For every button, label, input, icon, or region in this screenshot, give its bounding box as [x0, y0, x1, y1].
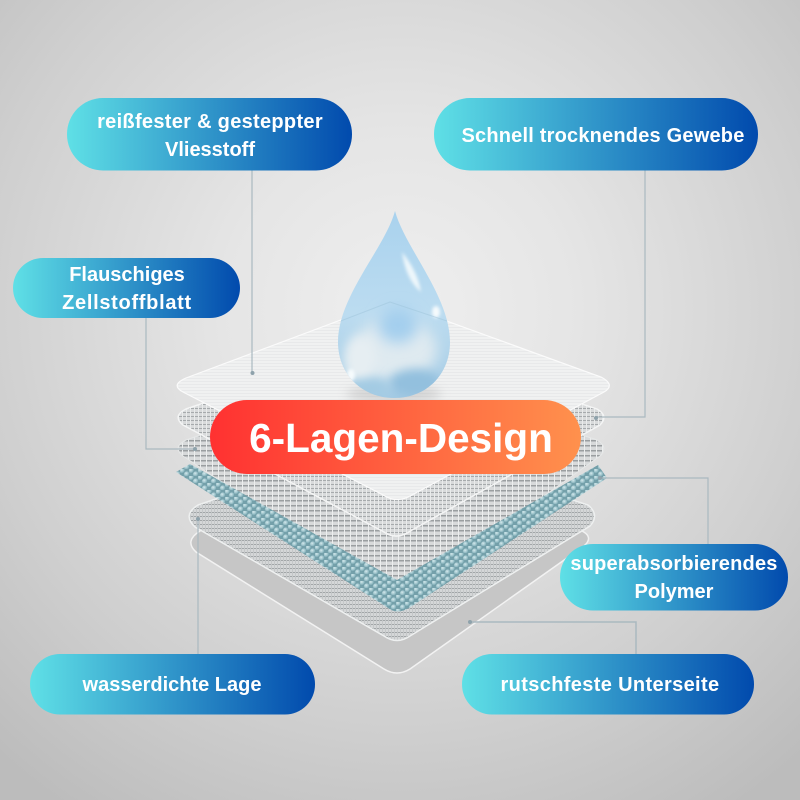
- layer 3: fluffy pulp sheet: [178, 370, 604, 594]
- layer 4: superabsorbent polymer beads: [176, 464, 607, 612]
- pill: wasserdichte Lage: [30, 654, 315, 714]
- icon: water drop: [338, 211, 450, 402]
- pill: Schnell trocknendes Gewebe: [434, 98, 758, 170]
- pill: rutschfeste Unterseite: rutschfeste Unterseite: [501, 674, 719, 696]
- pill: reißfester & gesteppter Vliesstoff: reißfester & gesteppter: [97, 111, 323, 133]
- pill: reißfester & gesteppter Vliesstoff: Vliesstoff: [165, 139, 255, 161]
- pill: Flauschiges Zellstoffblatt: Flauschiges: [69, 264, 185, 286]
- pill: superabsorbierendes Polymer: [560, 544, 788, 610]
- pill: reißfester & gesteppter Vliesstoff: [67, 98, 352, 170]
- layer 1: quilted nonwoven: [177, 303, 609, 500]
- pill: Flauschiges Zellstoffblatt: Zellstoffblatt: [62, 292, 192, 314]
- layer 6: non-slip underside: [191, 452, 589, 673]
- pill: wasserdichte Lage: wasserdichte Lage: [82, 674, 261, 696]
- pill: Schnell trocknendes Gewebe: Schnell trocknendes Gewebe: [461, 125, 745, 147]
- layer 5: waterproof layer: [189, 440, 595, 640]
- title: 6-Lagen-Design: 6-Lagen-Design: [249, 415, 553, 461]
- title: 6-Lagen-Design: [210, 400, 581, 474]
- leader lines: [146, 170, 708, 654]
- pill: superabsorbierendes Polymer: superabsorbierendes: [570, 553, 778, 575]
- layer 2: quick-dry fabric: [178, 340, 604, 536]
- layered pad illustration: [176, 303, 609, 673]
- pill: Flauschiges Zellstoffblatt: [13, 258, 240, 318]
- pill: rutschfeste Unterseite: [462, 654, 754, 714]
- pill: superabsorbierendes Polymer: Polymer: [635, 581, 714, 603]
